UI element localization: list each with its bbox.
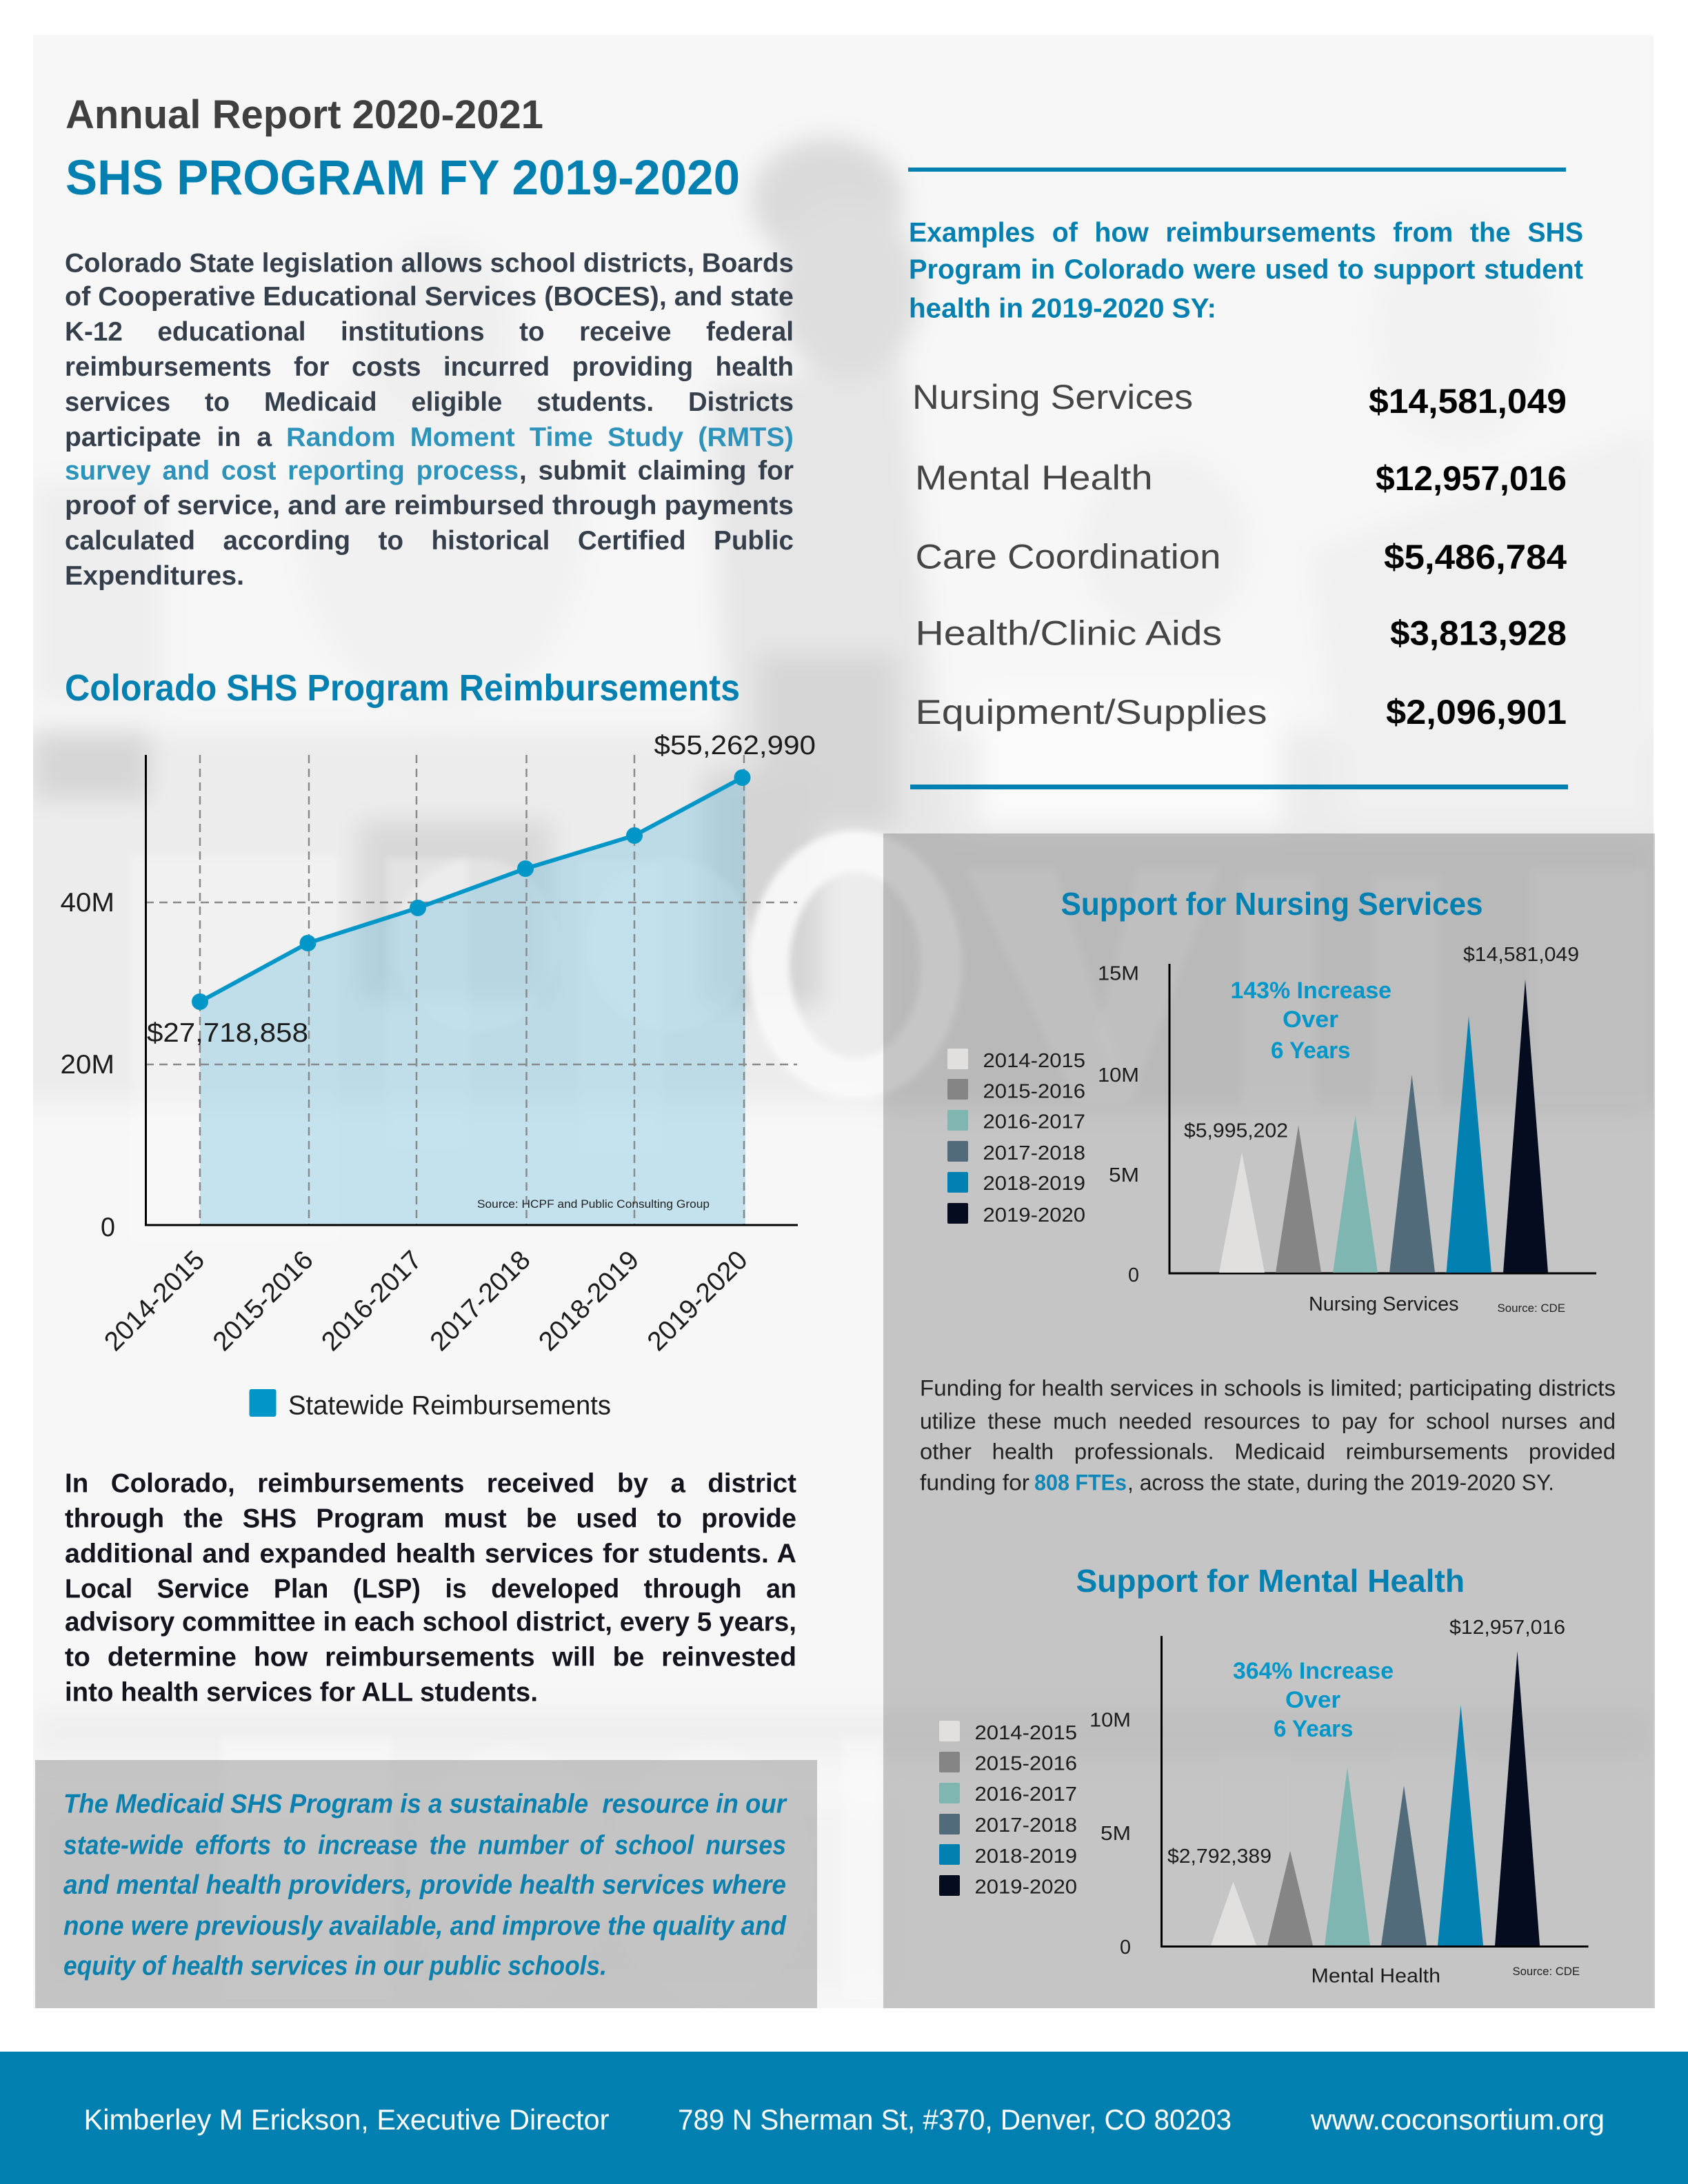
footer <box>0 2052 1688 2184</box>
y axis labels: 5M <box>1109 1164 1139 1186</box>
data line <box>200 778 742 1002</box>
row: equipment/supplies: $2,096,901 <box>1386 693 1567 731</box>
value labels: $12,957,016 <box>1449 1617 1565 1639</box>
intro paragraph: reimbursements for costs incurred providing health <box>65 352 794 382</box>
bars <box>1211 1651 1540 1945</box>
intro paragraph: calculated according to historical Certified Public <box>65 526 794 556</box>
callout: sustainable resource <box>63 1790 787 1981</box>
paragraph: use of reimbursements: In Colorado, reimbursements received by a district <box>65 1468 796 1499</box>
report year heading: Annual Report 2020-2021 <box>66 92 543 137</box>
y axis labels <box>61 888 115 1242</box>
row: health/clinic aids: $3,813,928 <box>1390 614 1567 652</box>
y axis labels: 0 <box>1128 1264 1139 1286</box>
intro paragraph: K-12 educational institutions to receive federal <box>65 317 794 347</box>
x axis title: Mental Health <box>1312 1965 1440 1987</box>
row: nursing services: $14,581,049 <box>1369 382 1567 421</box>
intro paragraph: Random Moment Time Study (RMTS) <box>286 423 794 452</box>
row: nursing services: Nursing Services <box>912 378 1193 416</box>
x axis labels: 2018-2019 <box>533 1245 645 1357</box>
paragraph: use of reimbursements: to determine how reimbursements will be reinvested <box>65 1642 796 1672</box>
legend: 2019-2020 <box>975 1877 1077 1899</box>
heading: mental health: Support for Mental Health <box>1076 1563 1465 1599</box>
legend: 2016-2017 <box>983 1111 1085 1133</box>
paragraph: funding for health services: other health professionals. Medicaid reimbursements provided <box>920 1439 1616 1464</box>
legend: Statewide Reimbursements <box>288 1391 611 1420</box>
chart: nursing services <box>947 944 1596 1315</box>
x axis labels: 2014-2015 <box>99 1245 210 1357</box>
row: mental health: Mental Health <box>915 458 1153 497</box>
callout: sustainable resource: The Medicaid SHS Program is a sustainable resource in our <box>63 1790 787 1819</box>
paragraph: use of reimbursements <box>65 1468 796 1707</box>
program title: SHS PROGRAM FY 2019-2020 <box>66 151 740 205</box>
intro paragraph: participate in a <box>65 423 272 452</box>
intro paragraph: proof of service, and are reimbursed through payments <box>65 491 794 520</box>
chart: mental health <box>939 1617 1589 1987</box>
paragraph: funding for health services: 808 FTEs <box>1034 1470 1127 1495</box>
value labels: $2,792,389 <box>1167 1846 1272 1868</box>
legend: 2014-2015 <box>975 1722 1077 1744</box>
callout: sustainable resource: state-wide efforts to increase the number of school nurses <box>63 1831 786 1860</box>
source note: Source: HCPF and Public Consulting Group <box>477 1197 710 1211</box>
callout: sustainable resource: none were previously available, and improve the quality and <box>63 1911 787 1941</box>
title block <box>66 92 740 205</box>
legend <box>939 1721 1077 1899</box>
intro paragraph: Expenditures. <box>65 561 244 591</box>
legend: 2018-2019 <box>975 1846 1077 1868</box>
legend: 2019-2020 <box>983 1204 1085 1226</box>
area under the line <box>200 778 745 1225</box>
x axis labels: 2019-2020 <box>642 1245 754 1357</box>
data points <box>192 769 750 1010</box>
value label: 2014-2015: $27,718,858 <box>147 1018 308 1048</box>
value labels <box>1184 944 1579 1142</box>
value label: 2019-2020: $55,262,990 <box>654 731 816 760</box>
intro paragraph: of Cooperative Educational Services (BOCES), and state <box>65 282 794 312</box>
row: health/clinic aids: Health/Clinic Aids <box>916 614 1222 652</box>
x axis title: Nursing Services <box>1309 1293 1459 1315</box>
paragraph: funding for health services: Funding for health services in schools is limited; participating districts <box>920 1376 1616 1401</box>
row: mental health: $12,957,016 <box>1376 459 1567 498</box>
increase callout: 364% Increase <box>1233 1658 1394 1684</box>
row: equipment/supplies: Equipment/Supplies <box>916 693 1267 731</box>
x axis labels: 2016-2017 <box>316 1245 428 1357</box>
examples intro text: Program in Colorado were used to support student <box>909 254 1583 285</box>
divider bottom <box>910 785 1568 789</box>
legend: 2018-2019 <box>983 1173 1085 1195</box>
y axis labels: 5M <box>1101 1823 1131 1845</box>
source note: Source: CDE <box>1498 1302 1565 1315</box>
examples intro text: health in 2019-2020 SY: <box>909 294 1216 324</box>
footer: address: 789 N Sherman St, #370, Denver, CO 80203 <box>678 2103 1232 2136</box>
callout: sustainable resource: and mental health providers, provide health services where <box>63 1870 786 1900</box>
row: care coordination <box>916 538 1567 576</box>
intro paragraph: survey and cost reporting process <box>65 456 519 485</box>
paragraph: use of reimbursements: through the SHS Program must be used to provide <box>65 1504 796 1533</box>
paragraph: use of reimbursements: into health services for ALL students. <box>65 1678 538 1707</box>
y axis labels: 40M <box>61 888 114 918</box>
x axis labels: 2017-2018 <box>425 1245 536 1357</box>
x axis labels: 2015-2016 <box>208 1245 319 1357</box>
y axis labels: 10M <box>1098 1064 1139 1086</box>
y axis labels: 0 <box>101 1213 115 1242</box>
heading: reimbursements chart: Colorado SHS Program Reimbursements <box>65 667 740 709</box>
paragraph: funding for health services: , across the state, during the 2019-2020 SY. <box>1127 1470 1554 1495</box>
value labels: $5,995,202 <box>1184 1120 1288 1142</box>
legend: 2017-2018 <box>983 1142 1085 1164</box>
intro paragraph: Colorado State legislation allows school districts, Boards <box>65 248 794 279</box>
paragraph: funding for health services: utilize these much needed resources to pay for school nurses and <box>920 1409 1616 1434</box>
line chart: statewide reimbursements <box>61 731 816 1420</box>
callout: sustainable resource: equity of health services in our public schools. <box>63 1951 607 1981</box>
examples intro text <box>909 218 1583 324</box>
y axis labels: 10M <box>1089 1710 1131 1732</box>
intro paragraph: , submit claiming for <box>519 456 794 485</box>
increase callout: 6 Years <box>1271 1038 1350 1064</box>
row: nursing services <box>912 378 1567 421</box>
increase callout <box>1233 1658 1394 1742</box>
divider top <box>908 168 1566 172</box>
y axis labels: 15M <box>1098 962 1139 984</box>
y axis labels <box>1098 962 1139 1286</box>
paragraph: use of reimbursements: Local Service Plan (LSP) is developed through an <box>65 1575 796 1604</box>
row: health/clinic aids <box>916 614 1567 652</box>
heading: nursing services: Support for Nursing Services <box>1061 886 1483 922</box>
legend: 2015-2016 <box>975 1752 1077 1775</box>
legend: 2016-2017 <box>975 1783 1077 1806</box>
value labels: $14,581,049 <box>1463 944 1579 966</box>
row: mental health <box>915 458 1567 498</box>
increase callout: 143% Increase <box>1230 978 1391 1004</box>
paragraph: use of reimbursements: additional and expanded health services for students. A <box>65 1539 796 1569</box>
row: care coordination: $5,486,784 <box>1384 538 1567 576</box>
legend: 2015-2016 <box>983 1081 1085 1103</box>
paragraph: funding for health services <box>920 1376 1616 1495</box>
y axis labels: 20M <box>61 1050 114 1080</box>
row: equipment/supplies <box>916 693 1567 731</box>
increase callout: 6 Years <box>1274 1716 1353 1742</box>
source note: Source: CDE <box>1513 1965 1580 1978</box>
x axis labels <box>99 1245 754 1357</box>
footer: director: Kimberley M Erickson, Executive Director <box>84 2103 610 2136</box>
increase callout: Over <box>1283 1007 1338 1033</box>
legend: 2017-2018 <box>975 1814 1077 1837</box>
y axis labels: 0 <box>1120 1937 1131 1959</box>
increase callout <box>1230 978 1391 1064</box>
examples intro text: Examples of how reimbursements from the SHS <box>909 218 1583 248</box>
paragraph: use of reimbursements: advisory committee in each school district, every 5 years, <box>65 1608 796 1637</box>
footer: website: www.coconsortium.org <box>1310 2103 1605 2136</box>
legend <box>947 1049 1085 1226</box>
value labels <box>1167 1617 1565 1868</box>
bars <box>1219 980 1548 1273</box>
legend: 2014-2015 <box>983 1050 1085 1072</box>
paragraph: funding for health services: funding for <box>920 1470 1029 1495</box>
row: care coordination: Care Coordination <box>916 538 1220 576</box>
intro paragraph <box>65 248 794 591</box>
grey panel: nursing and mental health <box>883 833 1655 2008</box>
y axis labels <box>1089 1710 1131 1959</box>
increase callout: Over <box>1285 1687 1340 1713</box>
reimbursement table <box>912 378 1567 731</box>
intro paragraph: services to Medicaid eligible students. Districts <box>65 387 794 417</box>
grey panel: callout background <box>35 1760 817 2008</box>
